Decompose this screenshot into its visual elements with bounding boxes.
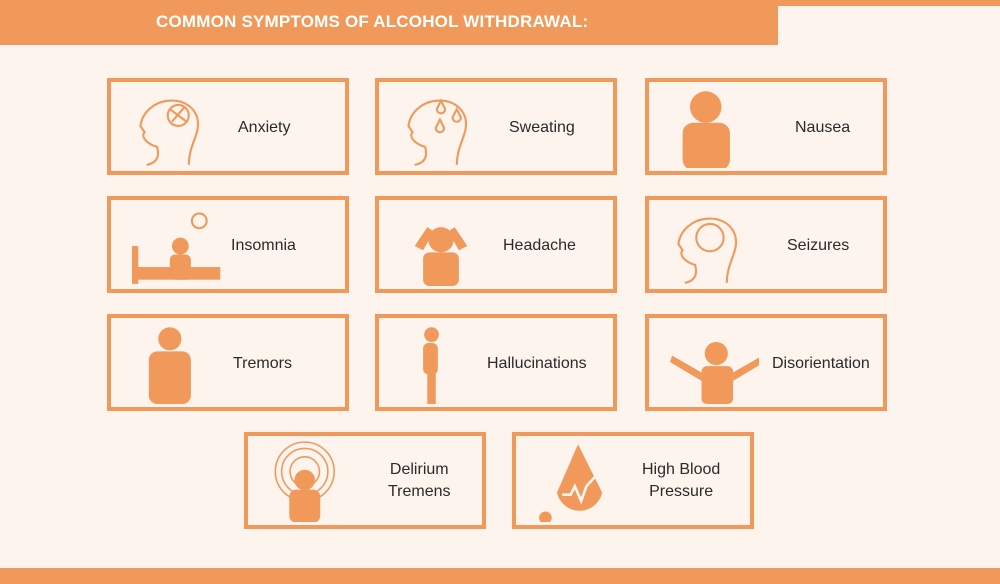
panel: anxiety — [107, 78, 349, 175]
label — [388, 461, 451, 500]
icon: person — [148, 327, 191, 404]
label: Delirium — [390, 461, 449, 478]
label: Nausea — [795, 119, 850, 136]
panel: headache — [375, 196, 617, 293]
icon: head drops — [407, 98, 468, 166]
label: Tremens — [388, 483, 451, 500]
label: Anxiety — [238, 119, 290, 136]
panel: high blood pressure — [512, 432, 754, 529]
panel: insomnia — [107, 196, 349, 293]
label — [642, 461, 720, 500]
panel: delirium tremens — [244, 432, 486, 529]
icon: shrug — [670, 342, 759, 404]
bottom bar — [0, 568, 1000, 584]
label: Disorientation — [772, 355, 870, 372]
panel: seizures — [645, 196, 887, 293]
label: Pressure — [649, 483, 713, 500]
title: COMMON SYMPTOMS OF ALCOHOL WITHDRAWAL: — [156, 12, 588, 31]
label: Seizures — [787, 237, 849, 254]
label: Hallucinations — [487, 355, 587, 372]
icon: person headache — [414, 227, 468, 286]
icon: blood drop — [539, 444, 602, 522]
icon: brain head — [677, 218, 738, 284]
panel: nausea — [645, 78, 887, 175]
label: High Blood — [642, 461, 720, 478]
icon: spiral person — [274, 441, 335, 522]
label: Tremors — [233, 355, 292, 372]
icon: bed — [132, 212, 220, 284]
label: Headache — [503, 237, 576, 254]
icon: person — [682, 91, 730, 168]
panel: tremors — [107, 314, 349, 411]
label: Sweating — [509, 119, 575, 136]
panel: hallucinations — [375, 314, 617, 411]
panel: sweating — [375, 78, 617, 175]
icon: head — [139, 100, 200, 166]
icon: figure — [423, 327, 439, 404]
label: Insomnia — [231, 237, 296, 254]
panel: disorientation — [645, 314, 887, 411]
header bar — [0, 0, 778, 45]
